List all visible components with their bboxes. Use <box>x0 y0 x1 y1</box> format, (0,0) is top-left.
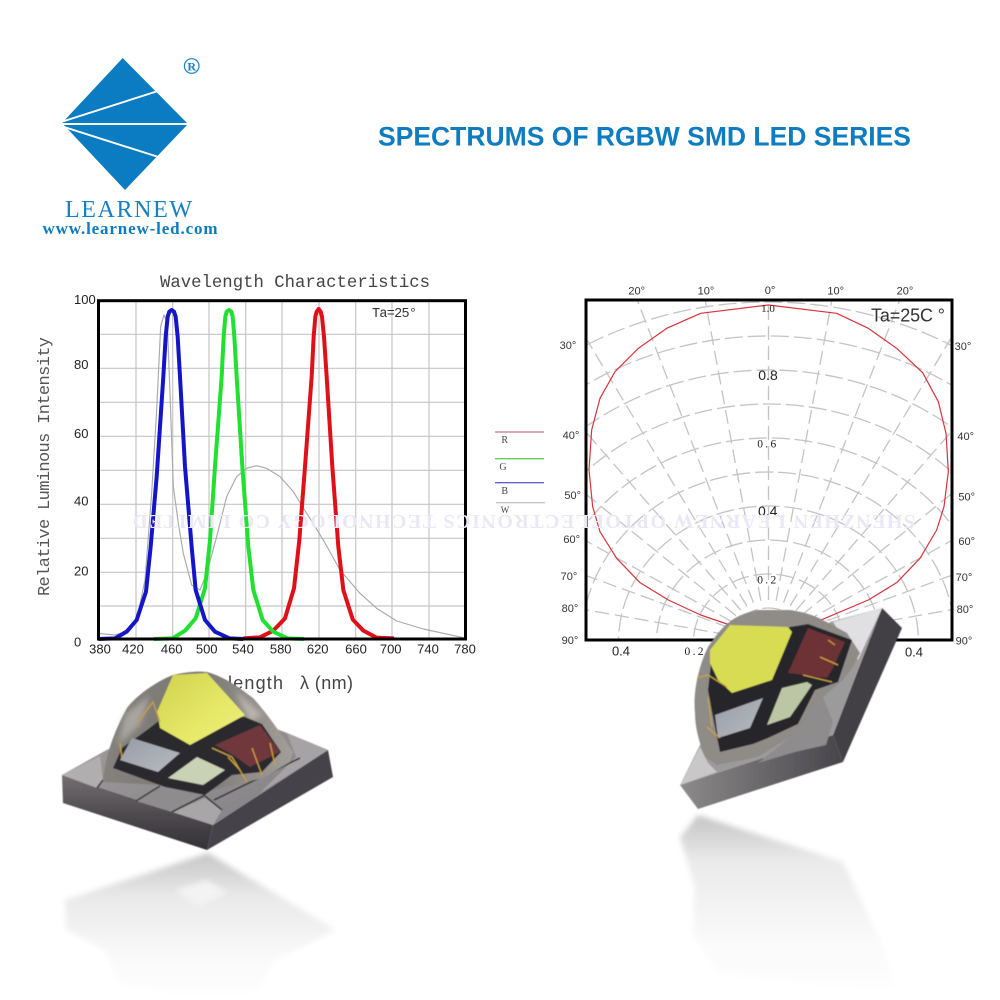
red chip <box>788 628 845 678</box>
left angle labels: 90° <box>562 635 578 647</box>
panel: wavelength characteristics chart <box>36 274 476 693</box>
legend R: R <box>501 435 508 446</box>
bottom scale labels: 0.2 <box>684 646 704 658</box>
brand name: LEARNEW <box>65 197 192 223</box>
x axis ticks: 620 <box>307 642 329 656</box>
x axis ticks: 500 <box>196 642 218 656</box>
polar grid <box>588 302 950 638</box>
bottom scale labels: 0.4 <box>905 644 923 660</box>
x axis ticks: 540 <box>232 642 254 656</box>
y axis ticks: 0 <box>74 634 81 650</box>
x axis ticks: 700 <box>380 642 402 656</box>
radial scale labels: 1.0 <box>761 303 775 315</box>
logo <box>42 58 218 238</box>
radial scale labels: 0.6 <box>757 438 776 450</box>
right angle labels: 30° <box>955 341 971 353</box>
left angle labels: 60° <box>563 534 580 546</box>
red spectrum curve <box>243 309 394 638</box>
gold bond wires <box>120 702 275 782</box>
base right side <box>207 750 333 850</box>
right angle labels: 60° <box>958 536 975 548</box>
plot frame <box>98 301 466 639</box>
top angle labels: 20° <box>897 286 913 298</box>
gold bond wires <box>697 640 838 738</box>
y axis ticks: 60 <box>74 426 88 441</box>
x axis ticks: 460 <box>161 642 183 656</box>
legend B: B <box>501 486 508 497</box>
temperature note: Ta=25C ° <box>871 306 945 326</box>
front pads <box>62 756 222 825</box>
legend G: G <box>499 462 507 473</box>
x axis title: λ (nm) <box>300 673 353 693</box>
top angle labels <box>628 285 913 298</box>
bottom scale labels: 0.4 <box>612 644 630 658</box>
dome mottling <box>118 690 262 745</box>
x axis ticks: 420 <box>122 642 144 656</box>
right ledge highlight <box>260 733 328 793</box>
x axis ticks: 380 <box>89 642 111 656</box>
left angle labels: 50° <box>564 490 581 502</box>
grid <box>98 301 466 639</box>
title: SPECTRUMS OF RGBW SMD LED SERIES <box>378 122 911 152</box>
lower pads <box>758 697 833 763</box>
lens dome <box>103 672 293 790</box>
blue chip <box>120 738 180 772</box>
base top face <box>680 608 882 785</box>
radial scale labels: 0.4 <box>758 503 778 519</box>
white corner highlight <box>833 608 882 660</box>
right angle labels <box>955 341 975 648</box>
y axis ticks: 20 <box>74 564 88 578</box>
reflection: left LED <box>65 853 336 1000</box>
icon: left RGBW LED chip <box>62 672 333 850</box>
top angle labels: 10° <box>827 286 844 298</box>
dark die mount <box>708 624 852 752</box>
right angle labels: 40° <box>957 431 974 443</box>
green chip <box>767 682 812 725</box>
red chip <box>215 725 280 767</box>
chart heading: Wavelength Characteristics <box>160 274 430 293</box>
top angle labels: 20° <box>628 286 645 298</box>
base right side <box>833 608 902 762</box>
x axis ticks: 780 <box>454 642 476 656</box>
panel: polar radiation chart <box>560 286 974 656</box>
left corner highlight <box>680 747 717 785</box>
left angle labels: 80° <box>562 603 578 615</box>
left angle labels: 30° <box>560 340 576 352</box>
left angle labels <box>560 340 581 647</box>
top angle labels: 10° <box>698 286 714 298</box>
panel: legend <box>495 432 545 515</box>
right angle labels: 90° <box>956 636 972 648</box>
left angle labels: 70° <box>561 571 577 583</box>
website: www.learnew-led.com <box>42 219 218 238</box>
diamond light rays <box>61 91 190 158</box>
solder pad dividers <box>97 758 300 812</box>
reflection: right LED <box>680 815 900 997</box>
right angle labels: 70° <box>956 572 972 584</box>
x axis title <box>178 673 353 693</box>
lens dome <box>695 610 860 765</box>
white phosphor chip <box>710 625 792 693</box>
x axis ticks: 740 <box>417 642 439 656</box>
white phosphor chip <box>157 673 245 745</box>
base top face <box>62 700 328 825</box>
green chip <box>168 757 225 785</box>
radial scale labels <box>757 303 778 586</box>
icon: blue diamond <box>62 58 188 190</box>
x axis title: Wavelength <box>178 673 283 693</box>
x axis ticks <box>89 642 476 656</box>
plot frame <box>586 300 952 640</box>
y axis ticks: 40 <box>74 494 88 508</box>
radial scale labels: 0.2 <box>757 574 776 586</box>
right angle labels: 50° <box>958 492 975 504</box>
base left side <box>62 775 213 850</box>
registered mark <box>184 59 199 74</box>
y axis ticks <box>74 292 96 650</box>
blue spectrum curve <box>98 310 243 639</box>
top angle labels: 0° <box>765 285 775 297</box>
registered mark: R <box>187 60 196 74</box>
watermark: SHENZHEN LEARNEW OPTOELECTRONICS TECHNOLOGY CO LIMITED <box>133 510 915 532</box>
left angle labels: 40° <box>563 430 579 442</box>
y axis ticks: 100 <box>74 292 96 307</box>
radiation pattern curve <box>589 305 948 642</box>
blue chip <box>715 698 763 738</box>
x axis ticks: 580 <box>270 642 292 656</box>
white spectrum curve <box>98 315 463 638</box>
temperature note: Ta=25° <box>372 307 417 322</box>
bottom scale labels <box>612 644 923 660</box>
x axis ticks: 660 <box>345 642 367 656</box>
green spectrum curve <box>154 310 304 639</box>
dark die mount <box>113 717 281 795</box>
y axis ticks: 80 <box>74 357 88 372</box>
y axis title: Relative Luminous Intensity <box>36 337 55 596</box>
legend W: W <box>501 505 510 515</box>
icon: right RGBW LED chip <box>680 608 902 809</box>
right angle labels: 80° <box>957 604 973 616</box>
base front side <box>680 735 843 809</box>
radial scale labels: 0.8 <box>758 367 778 383</box>
